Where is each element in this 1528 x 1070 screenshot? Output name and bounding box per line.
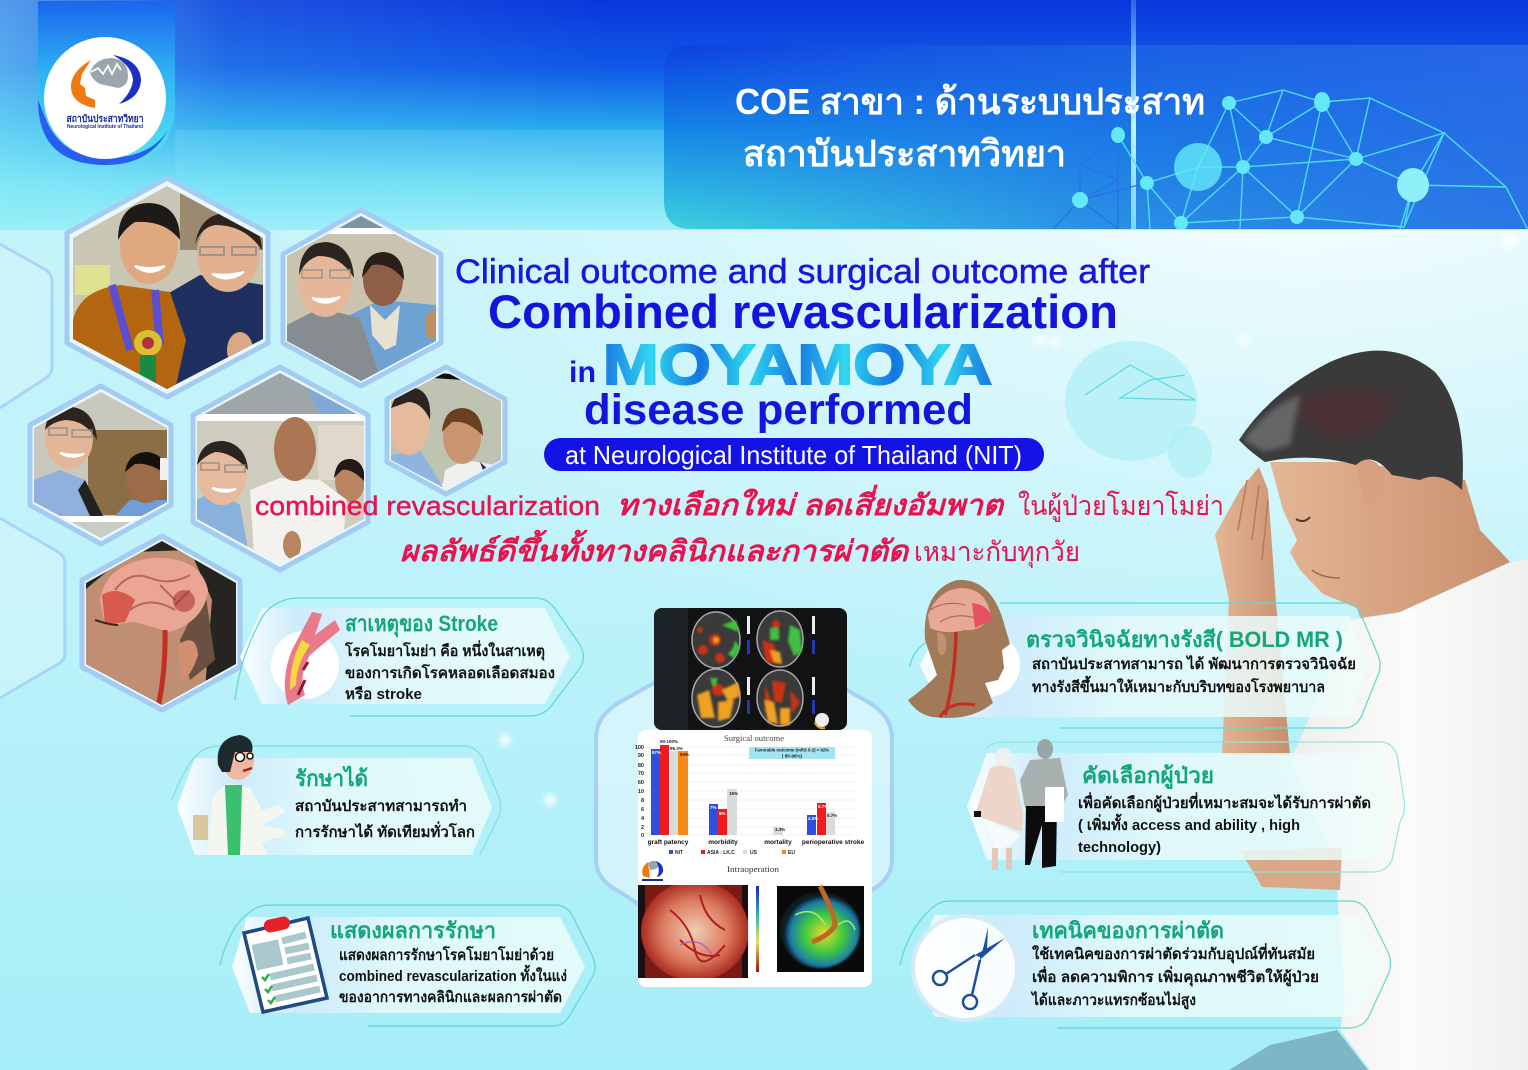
bar chart: surgical outcome: 90: [638, 753, 644, 759]
pink subtitle: combined revascularization: [255, 491, 600, 521]
bar chart: surgical outcome: NIT: [675, 850, 683, 856]
photo: doctor and boy: [30, 386, 171, 544]
bar chart: surgical outcome: US: [750, 850, 758, 856]
title line 4: disease performed: [584, 386, 973, 434]
panel: patient selection: คัดเลือกผู้ป่วย: [1082, 763, 1214, 790]
bar chart: surgical outcome: 5.7%: [827, 813, 837, 818]
panel: cause of stroke: โรคโมยาโมย่า คือ หนึ่งในสาเหตุ: [344, 640, 545, 661]
panel: treatment: รักษาได้: [295, 765, 368, 791]
panel: surgical technique: ได้และภาวะแทรกซ้อนไม่สูง: [1030, 990, 1196, 1010]
panel: cause of stroke: [235, 598, 584, 716]
man: hair: [1239, 351, 1463, 490]
MOYAMOYA wordmark: MOYAMOYA: [603, 333, 992, 397]
photo: doctor and patient: [283, 210, 443, 386]
bar chart: surgical outcome: 6: [641, 807, 644, 813]
man: face and neck: [1270, 462, 1510, 618]
logo: head mark: [71, 55, 141, 108]
panel: treatment results: ของอาการทางคลินิกและผลการผ่าตัด: [339, 988, 562, 1006]
panel: BOLD MR diagnosis: สถาบันประสาทสามารถ ได้ พัฒนาการตรวจวินิจฉัย: [1032, 654, 1356, 673]
bar chart: surgical outcome: 94%: [680, 752, 689, 757]
bar chart: surgical outcome: 15%: [729, 791, 738, 796]
man: t-shirt: [1290, 560, 1528, 1070]
bar chart: surgical outcome: 4.5%: [808, 816, 818, 821]
bar chart: surgical outcome: perioperative stroke: [802, 839, 864, 846]
panel: surgical technique: [900, 901, 1390, 1028]
intraoperation label: Intraoperation: [727, 865, 779, 874]
panel: patient selection: [967, 739, 1404, 872]
ICG photo: [777, 886, 864, 972]
icon: artery: [271, 612, 340, 705]
logo badge: [38, 1, 175, 165]
panel: BOLD MR diagnosis: ทางรังสีขึ้นมาให้เหมาะกับบริบทของโรงพยาบาล: [1032, 675, 1325, 696]
logo: text: สถาบันประสาทวิทยา: [66, 113, 144, 125]
header title: [735, 81, 1205, 174]
bar chart: surgical outcome: ASIA : LK.C: [707, 850, 735, 856]
icon: surgical scissors: [913, 916, 1017, 1020]
panel: center evidence card: [596, 608, 892, 987]
bar chart: surgical outcome: 4: [641, 816, 645, 822]
bar chart: surgical outcome: 10: [638, 789, 644, 795]
panel: surgical technique: ใช้เทคนิคของการผ่าตัดร่วมกับอุปณ์ที่ทันสมัย: [1032, 943, 1315, 964]
panel: treatment: สถาบันประสาทสามารถทำ: [295, 798, 467, 815]
title line 1: Clinical outcome and surgical outcome after: [455, 253, 1150, 291]
panel: BOLD MR diagnosis: [908, 580, 1380, 728]
logo: text: Neurological Institute of Thailand: [67, 124, 143, 130]
panel: cause of stroke: ของการเกิดโรคหลอดเลือดสมอง: [345, 663, 555, 682]
panel: patient selection: เพื่อคัดเลือกผู้ป่วยที่เหมาะสมจะได้รับการผ่าตัด: [1078, 792, 1371, 813]
photo: boy and doctor: [65, 178, 275, 397]
header title: สถาบันประสาทวิทยา: [743, 133, 1066, 174]
bar chart: surgical outcome: 96.3%: [670, 746, 683, 751]
panel: treatment results: แสดงผลการรักษา: [330, 918, 496, 943]
bar chart: surgical outcome: 3.3%: [775, 827, 785, 832]
bar chart: surgical outcome: 97%: [652, 750, 661, 755]
bar chart: surgical outcome: 7%: [710, 805, 717, 810]
panel: surgical technique: เพื่อ ลดความพิการ เพิ่มคุณภาพชีวิตให้ผู้ป่วย: [1032, 966, 1319, 987]
panel: surgical technique: เทคนิคของการผ่าตัด: [1032, 918, 1224, 943]
bar chart: surgical outcome: mortality: [764, 839, 792, 846]
panel: treatment: [172, 735, 500, 855]
photo: doctor with man and woman: [190, 365, 370, 571]
surgical photo: [638, 881, 749, 981]
bar chart: surgical outcome: [635, 734, 864, 856]
bar chart: surgical outcome: 8: [641, 798, 644, 804]
header panel: [664, 0, 1528, 230]
title in: in: [569, 356, 596, 389]
bar chart: surgical outcome: 60: [638, 780, 644, 786]
location pill: at Neurological Institute of Thailand (NIT): [565, 440, 1022, 470]
icon: elderly couple: [974, 739, 1068, 870]
bar chart: surgical outcome: 0: [641, 833, 644, 839]
brain MRI scans: [654, 608, 847, 730]
pink subtitle: ทางเลือกใหม่ ลดเสี่ยงอัมพาต: [617, 484, 1005, 522]
man: forearm and hand: [1215, 467, 1342, 890]
panel: treatment: การรักษาได้ ทัดเทียมทั่วโลก: [295, 821, 475, 841]
network graphic: [1053, 90, 1528, 230]
icon: doctor: [193, 735, 285, 855]
pink subtitle: ผลลัพธ์ดีขึ้นทั้งทางคลินิกและการผ่าตัด: [400, 529, 910, 568]
bar chart: surgical outcome: 70: [638, 771, 644, 777]
small logo: [642, 861, 663, 881]
main title: [455, 253, 1150, 471]
icon: head with brain: [908, 580, 1020, 718]
color scale: [756, 886, 759, 972]
panel: patient selection: ( เพิ่มทั้ง access and ability , high: [1078, 813, 1300, 834]
pink subtitle: ในผู้ป่วยโมยาโมย่า: [1018, 490, 1224, 522]
panel: patient selection: technology): [1078, 839, 1161, 856]
bar chart: surgical outcome: ( 85-96%): [782, 754, 803, 758]
illustration: brain on head: [80, 535, 245, 710]
pink subtitle: [255, 484, 1224, 569]
bar chart: surgical outcome: morbidity: [708, 839, 738, 846]
title line 2: Combined revascularization: [488, 285, 1118, 338]
man holding head: [1215, 351, 1528, 1070]
bar chart: surgical outcome: EU: [788, 850, 795, 856]
bar chart: surgical outcome: 100: [635, 745, 644, 751]
bar chart: surgical outcome: 90-100%: [660, 739, 678, 744]
panel: treatment results: แสดงผลการรักษาโรคโมยาโมย่าด้วย: [339, 945, 554, 964]
icon: clipboard: [244, 915, 327, 1012]
bar chart: surgical outcome: 6.7%: [818, 804, 828, 809]
bar chart: surgical outcome: 80: [638, 763, 644, 769]
pink subtitle: เหมาะกับทุกวัย: [914, 537, 1080, 569]
bar chart: surgical outcome: Surgical outcome: [724, 734, 784, 743]
panel: cause of stroke: หรือ stroke: [345, 686, 422, 703]
logo: text: [66, 113, 144, 130]
header title: COE สาขา : ด้านระบบประสาท: [735, 81, 1205, 122]
bar chart: surgical outcome: 5%: [719, 811, 726, 816]
panel: BOLD MR diagnosis: ตรวจวินิจฉัยทางรังสี( BOLD MR ): [1026, 627, 1343, 652]
bar chart: surgical outcome: graft patency: [648, 839, 689, 846]
panel: cause of stroke: สาเหตุของ Stroke: [345, 611, 498, 638]
bar chart: surgical outcome: 2: [641, 825, 644, 831]
photo: doctor and nurse: [385, 365, 507, 494]
panel: treatment results: [220, 905, 595, 1026]
panel: treatment results: combined revascularization ทั้งในแง่: [339, 964, 567, 985]
bar chart: surgical outcome: Favorable outcome (mRS 0-2) = 92%: [755, 748, 829, 752]
decorative bubble: [1065, 341, 1212, 478]
photo hexagons: [30, 178, 507, 710]
